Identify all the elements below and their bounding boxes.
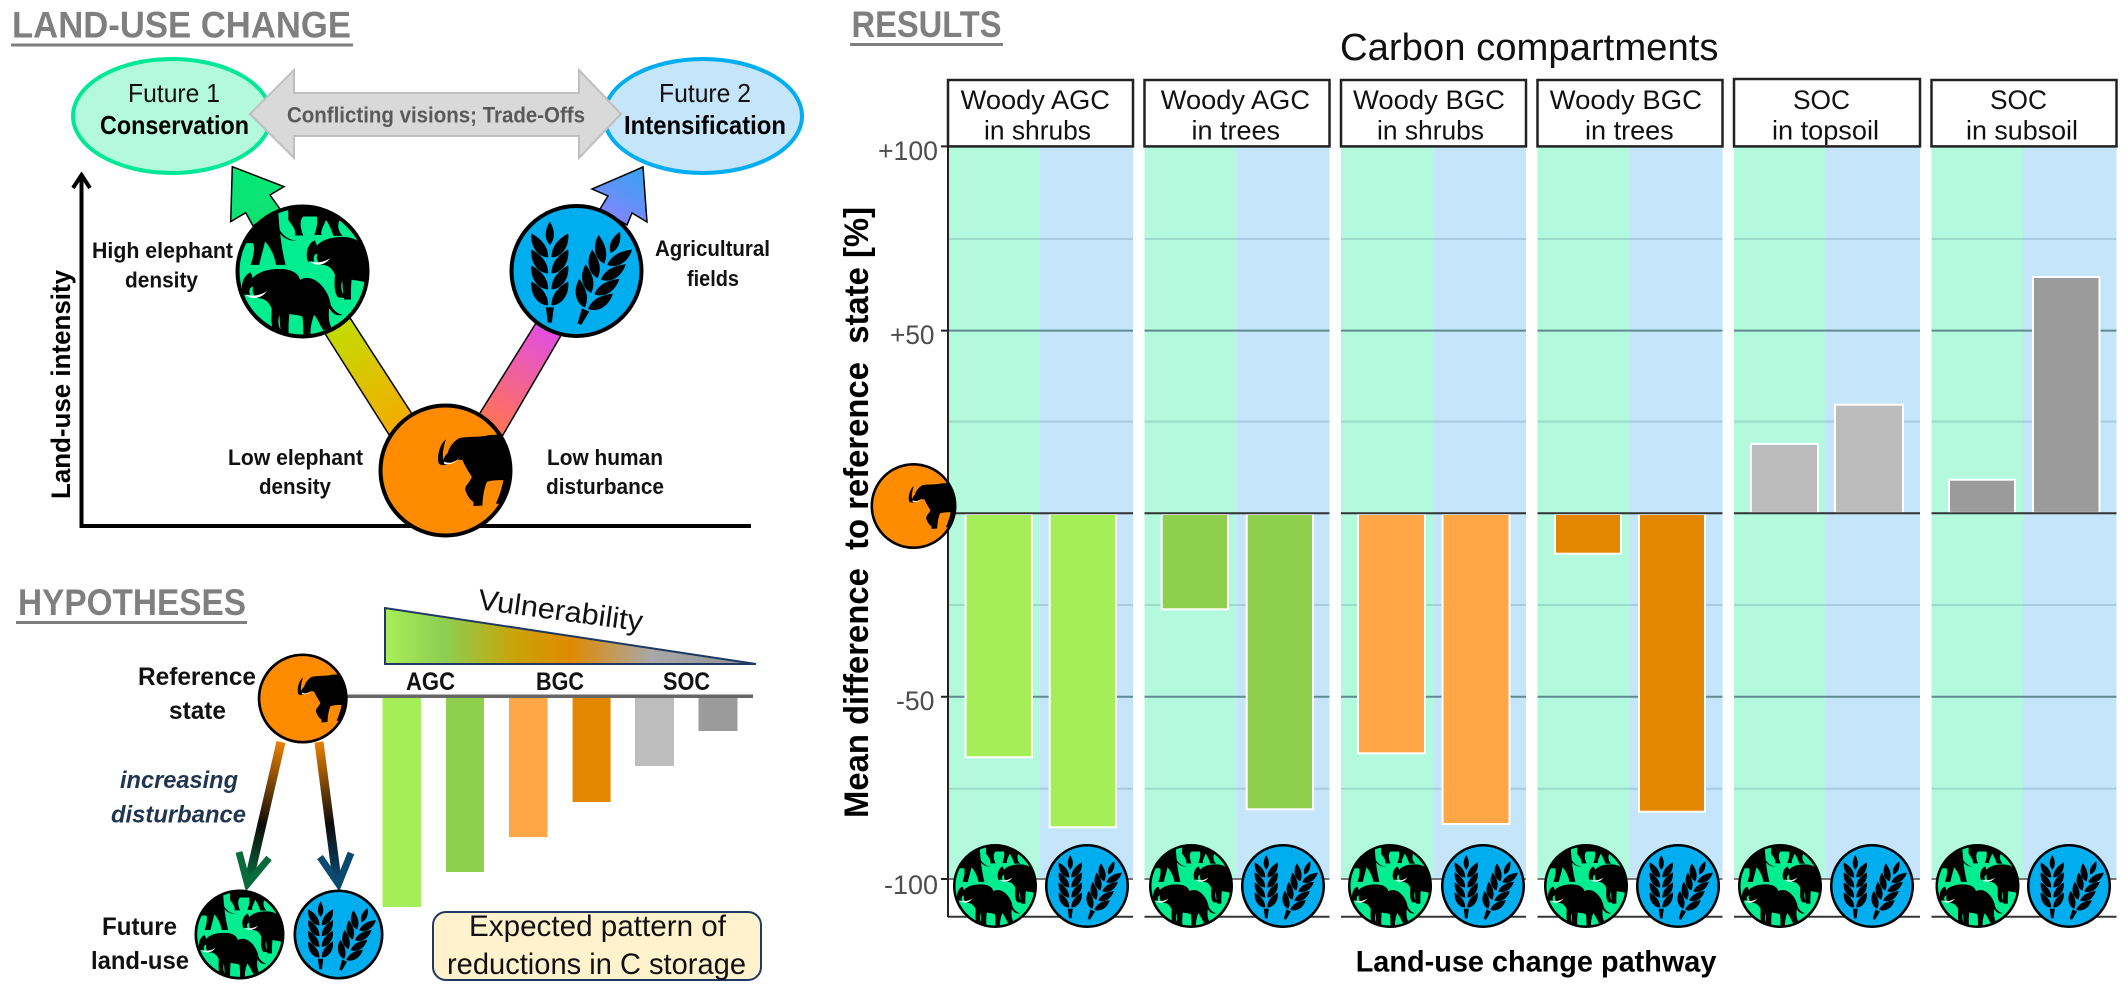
bar: intensification (1639, 514, 1705, 812)
facet: SOC in topsoil (1734, 79, 1920, 927)
label: high elephant density: density (125, 268, 199, 292)
bar: intensification (2033, 277, 2100, 513)
label: reference state: Reference (138, 663, 256, 691)
y tick labels: +50 (890, 320, 934, 350)
future 1 ellipse (73, 59, 271, 173)
label: agricultural fields: fields (687, 266, 739, 291)
icon: wheat (1442, 845, 1524, 927)
facet: woody AGC in shrubs (948, 80, 1133, 927)
strip: facet label (1538, 80, 1722, 146)
icon: wheat (2028, 845, 2110, 927)
strip: facet label: Woody AGC (1161, 85, 1310, 115)
label: low human disturbance: Low human (547, 445, 663, 470)
facet: woody AGC in trees (1144, 80, 1330, 927)
chart title: Carbon compartments (1340, 27, 1718, 69)
icon: future agriculture (295, 891, 382, 978)
bar: conservation (1949, 480, 2015, 513)
heading: results: RESULTS (852, 4, 1002, 45)
heading: land-use change: LAND-USE CHANGE (12, 4, 351, 46)
axis label: land-use intensity: Land-use intensity (46, 270, 76, 499)
vulnerability wedge (385, 608, 756, 664)
text: conservation: Conservation (100, 110, 249, 140)
icon: elephant (954, 843, 1058, 927)
reference baseline (340, 694, 753, 698)
strip: facet label: Woody BGC (1550, 85, 1702, 115)
axes (73, 175, 751, 526)
arrow: to conservation (239, 742, 281, 884)
strip: facet label: in shrubs (984, 116, 1091, 146)
strip: facet label: in shrubs (1377, 116, 1484, 146)
strip: facet label: in trees (1585, 116, 1674, 146)
text: future 1: Future 1 (128, 78, 220, 108)
strip: facet label: SOC (1793, 85, 1850, 115)
future 2 ellipse (604, 59, 802, 173)
bar: conservation (1555, 514, 1621, 554)
label: future land-use: Future (102, 913, 177, 941)
y axis title: Mean difference to reference state [%] (838, 207, 876, 818)
bar: conservation (1162, 514, 1228, 609)
strip: facet label: in topsoil (1772, 116, 1879, 146)
icon: elephant (1739, 843, 1843, 927)
y axis line and ticks (941, 146, 948, 917)
label: high elephant density (92, 238, 234, 292)
icon: wheat (1637, 845, 1719, 927)
label: reference state (138, 663, 256, 725)
strip: facet label: in trees (1192, 116, 1280, 146)
panel: land-use change (11, 4, 802, 535)
y tick labels: +100 (878, 136, 938, 166)
label: increasing disturbance: disturbance (111, 802, 246, 829)
label: future land-use (91, 913, 189, 975)
text: intensification: Intensification (624, 110, 786, 140)
icon: high elephant density (238, 203, 402, 336)
label: low elephant density: Low elephant (228, 445, 364, 470)
callout: expected pattern: reductions in C storage (447, 948, 746, 981)
facet: woody BGC in shrubs (1341, 80, 1526, 927)
callout: expected pattern: Expected pattern of (469, 910, 727, 943)
bar: conservation (1751, 444, 1818, 513)
icon: wheat (1242, 845, 1324, 927)
text: future 2: Future 2 (659, 78, 751, 108)
bar: intensification (1247, 514, 1313, 809)
icon: low elephant density reference (381, 406, 518, 535)
label: low human disturbance (546, 445, 664, 499)
bar: intensification (1442, 514, 1510, 824)
icon: elephant (1349, 843, 1453, 927)
bar: intensification (1835, 405, 1903, 513)
arrow: to intensification (319, 742, 351, 884)
strip: facet label: SOC (1990, 85, 2047, 115)
label: future land-use: land-use (91, 947, 189, 975)
strip: facet label: Woody BGC (1353, 85, 1505, 115)
text: vulnerability: Vulnerability (476, 584, 645, 638)
strip: facet label (1734, 79, 1920, 146)
strip: facet label (1932, 80, 2116, 146)
icon: wheat (1831, 845, 1913, 927)
heading: hypotheses: HYPOTHESES (18, 582, 246, 623)
icon: elephant (1937, 843, 2040, 927)
icon: future conservation (196, 889, 307, 978)
icon: reference state (259, 655, 352, 742)
y tick labels (878, 136, 938, 900)
y tick labels: -50 (896, 686, 934, 716)
strip: facet label: Woody AGC (961, 85, 1110, 115)
callout: expected pattern (433, 910, 761, 981)
y tick labels: -100 (884, 870, 938, 900)
bar: conservation (966, 514, 1032, 757)
icon: elephant (1545, 843, 1649, 927)
arrow head: intensification (592, 167, 647, 225)
label: low elephant density (228, 445, 364, 499)
strip: facet label (1144, 80, 1330, 146)
icon: wheat (1046, 845, 1128, 927)
label: low elephant density: density (259, 474, 332, 499)
label: agricultural fields: Agricultural (655, 236, 770, 261)
bar: intensification (1050, 514, 1116, 827)
label: SOC: SOC (663, 668, 710, 696)
icon: agricultural fields (512, 206, 641, 336)
pathway bar to intensification (470, 307, 570, 452)
label: AGC: AGC (406, 668, 455, 696)
strip: facet label: in subsoil (1966, 116, 2078, 146)
label: reference state: state (169, 697, 226, 725)
label: high elephant density: High elephant (92, 238, 234, 263)
facet: SOC in subsoil (1932, 80, 2116, 927)
facet: woody BGC in trees (1538, 80, 1722, 927)
icon: elephant (1150, 843, 1254, 927)
x axis title: Land-use change pathway (1356, 946, 1717, 979)
strip: facet label (1341, 80, 1526, 146)
panel: results (838, 4, 2116, 979)
label: low human disturbance: disturbance (546, 474, 664, 499)
expected bars (382, 697, 738, 907)
pathway bar to conservation (317, 304, 425, 452)
label: BGC: BGC (536, 668, 584, 696)
arrow head: conservation (231, 167, 284, 226)
icon: reference state on zero line (872, 464, 960, 548)
strip: facet label (948, 80, 1133, 146)
double arrow: trade-offs (250, 70, 621, 158)
label: increasing disturbance (111, 767, 246, 829)
label: increasing disturbance: increasing (120, 767, 238, 794)
label: agricultural fields (655, 236, 770, 291)
bar: conservation (1358, 514, 1425, 753)
text: conflicting visions: Conflicting visions; Trade-Offs (287, 102, 585, 128)
panel: hypotheses (16, 582, 761, 981)
